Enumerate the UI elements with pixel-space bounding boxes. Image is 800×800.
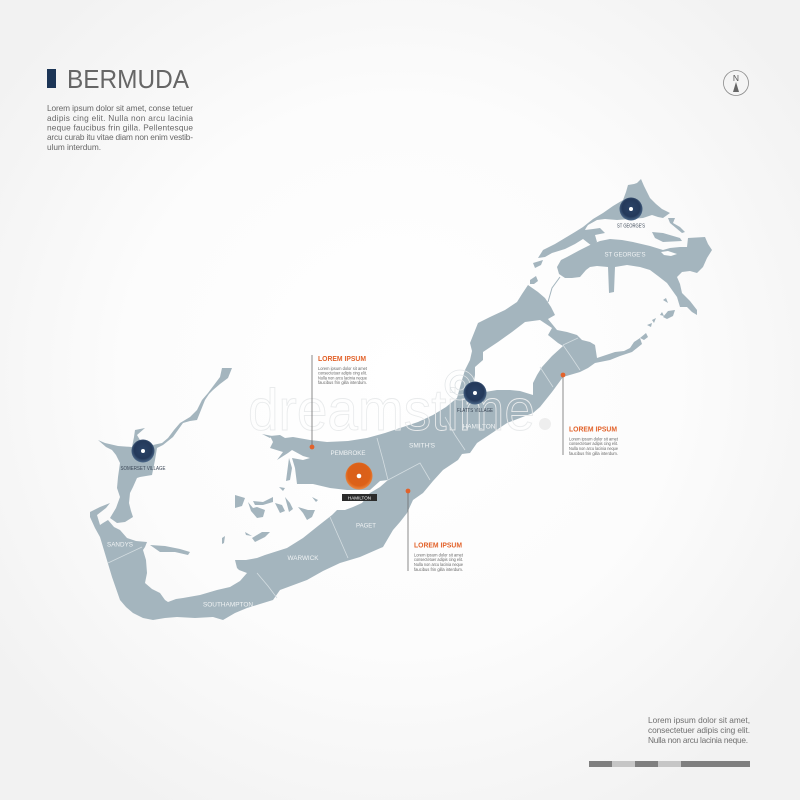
watermark: dreamstime [248, 378, 535, 443]
map labels: parishes: ST GEORGE'S [604, 252, 646, 258]
marker: Flatts Village [457, 382, 494, 414]
intro text: adipis cing elit. Nulla non arcu lacinia [47, 113, 193, 123]
callout: Pembroke: Nulla non arcu lacinia neque [318, 375, 368, 380]
icon: north compass: N [733, 73, 739, 83]
map labels: parishes: SANDYS [107, 542, 134, 548]
region: Somerset and northwest chain [98, 368, 232, 523]
marker: St George's [617, 198, 646, 230]
footer text: consectetuer adipis cing elit. [648, 725, 750, 735]
callout: Paget: Lorem ipsum dolor sit amet [414, 552, 464, 557]
map labels: parishes [107, 252, 646, 608]
callout: Hamilton parish [561, 373, 619, 456]
region: main island with parishes [90, 285, 642, 620]
parish borders [108, 338, 580, 598]
map labels: parishes: HAMILTON [462, 424, 496, 430]
callout: Pembroke: LOREM IPSUM [318, 354, 366, 363]
intro text: Lorem ipsum dolor sit amet, conse tetuer [47, 103, 193, 113]
marker: St George's: ST GEORGE'S [617, 224, 646, 230]
marker: Somerset Village: SOMERSET VILLAGE [120, 466, 166, 472]
scale bar [589, 761, 750, 767]
white bay: St George's east [661, 251, 677, 256]
callout: Paget: consectetuer adipis cing elit. [414, 557, 463, 562]
map labels: parishes: PAGET [356, 522, 376, 530]
intro text [47, 103, 193, 152]
callout: Paget: Nulla non arcu lacinia neque [414, 562, 464, 567]
region: St George's island [557, 237, 712, 315]
intro text: neque faucibus frin gilla. Pellentesque [47, 122, 193, 132]
intro text: arcu curab itu vitae diam non enim vestib- [47, 132, 193, 142]
icon: north compass [724, 70, 748, 96]
callout: Hamilton parish: Lorem ipsum dolor sit amet [569, 436, 619, 441]
callout: Paget [406, 489, 464, 572]
region: small islands [150, 218, 685, 555]
callout: Hamilton parish: LOREM IPSUM [569, 424, 617, 433]
callout: Pembroke: consectetuer adipis cing elit. [318, 371, 367, 376]
callout: Paget: faucibus frin gilla interdum. [414, 567, 463, 572]
callout: Hamilton parish: faucibus frin gilla interdum. [569, 451, 618, 456]
map labels: parishes: PEMBROKE [330, 450, 366, 457]
marker: Flatts Village: FLATTS VILLAGE [457, 408, 494, 414]
causeway line [548, 277, 560, 302]
intro text: ulum interdum. [47, 142, 101, 152]
footer text: Lorem ipsum dolor sit amet, [648, 715, 750, 725]
callout: Pembroke: Lorem ipsum dolor sit amet [318, 366, 368, 371]
map labels: parishes: SMITH'S [409, 442, 436, 450]
callout: Pembroke: faucibus frin gilla interdum. [318, 380, 367, 385]
marker: capital Hamilton [342, 462, 377, 502]
region: St George's north arm [538, 179, 670, 258]
callout: Paget: LOREM IPSUM [414, 540, 462, 549]
callout: Pembroke [310, 354, 368, 449]
callout: Hamilton parish: consectetuer adipis cing elit. [569, 441, 618, 446]
callout: Hamilton parish: Nulla non arcu lacinia neque [569, 446, 619, 451]
marker: Somerset Village [120, 440, 166, 472]
footer text [648, 715, 750, 745]
map labels: parishes: WARWICK [288, 555, 319, 562]
title accent bar [47, 69, 56, 88]
title: BERMUDA [67, 66, 189, 94]
map: Bermuda islands [90, 179, 712, 620]
footer text: Nulla non arcu lacinia neque. [648, 735, 748, 745]
map labels: parishes: SOUTHAMPTON [203, 602, 253, 608]
marker: capital Hamilton: HAMILTON [348, 496, 372, 502]
